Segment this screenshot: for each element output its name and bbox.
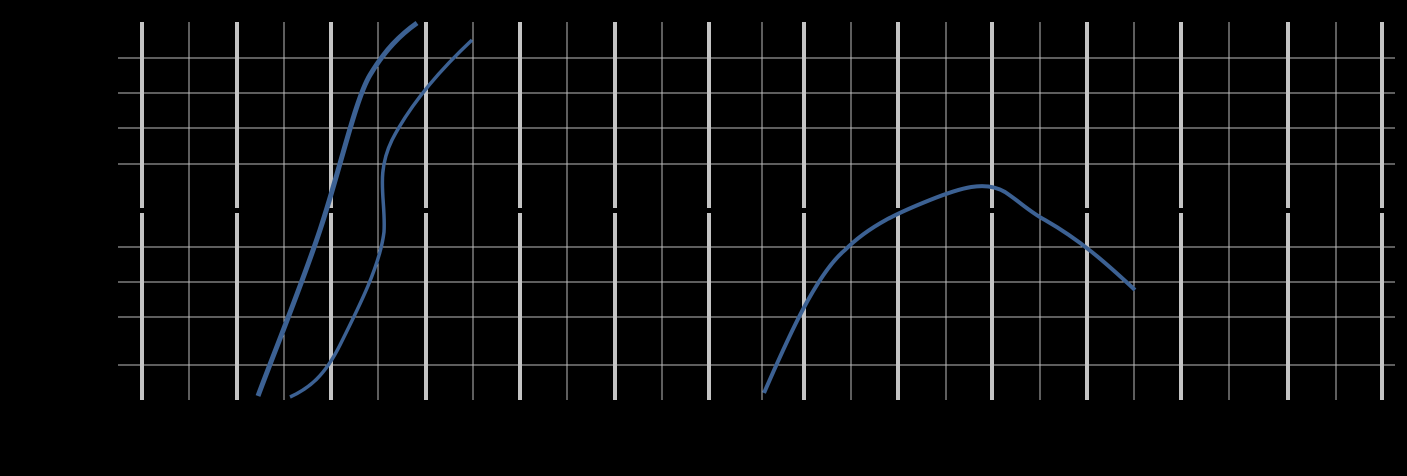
curve: left thin <box>290 40 472 397</box>
curve: right <box>764 186 1135 393</box>
curve: left thick <box>258 23 417 396</box>
